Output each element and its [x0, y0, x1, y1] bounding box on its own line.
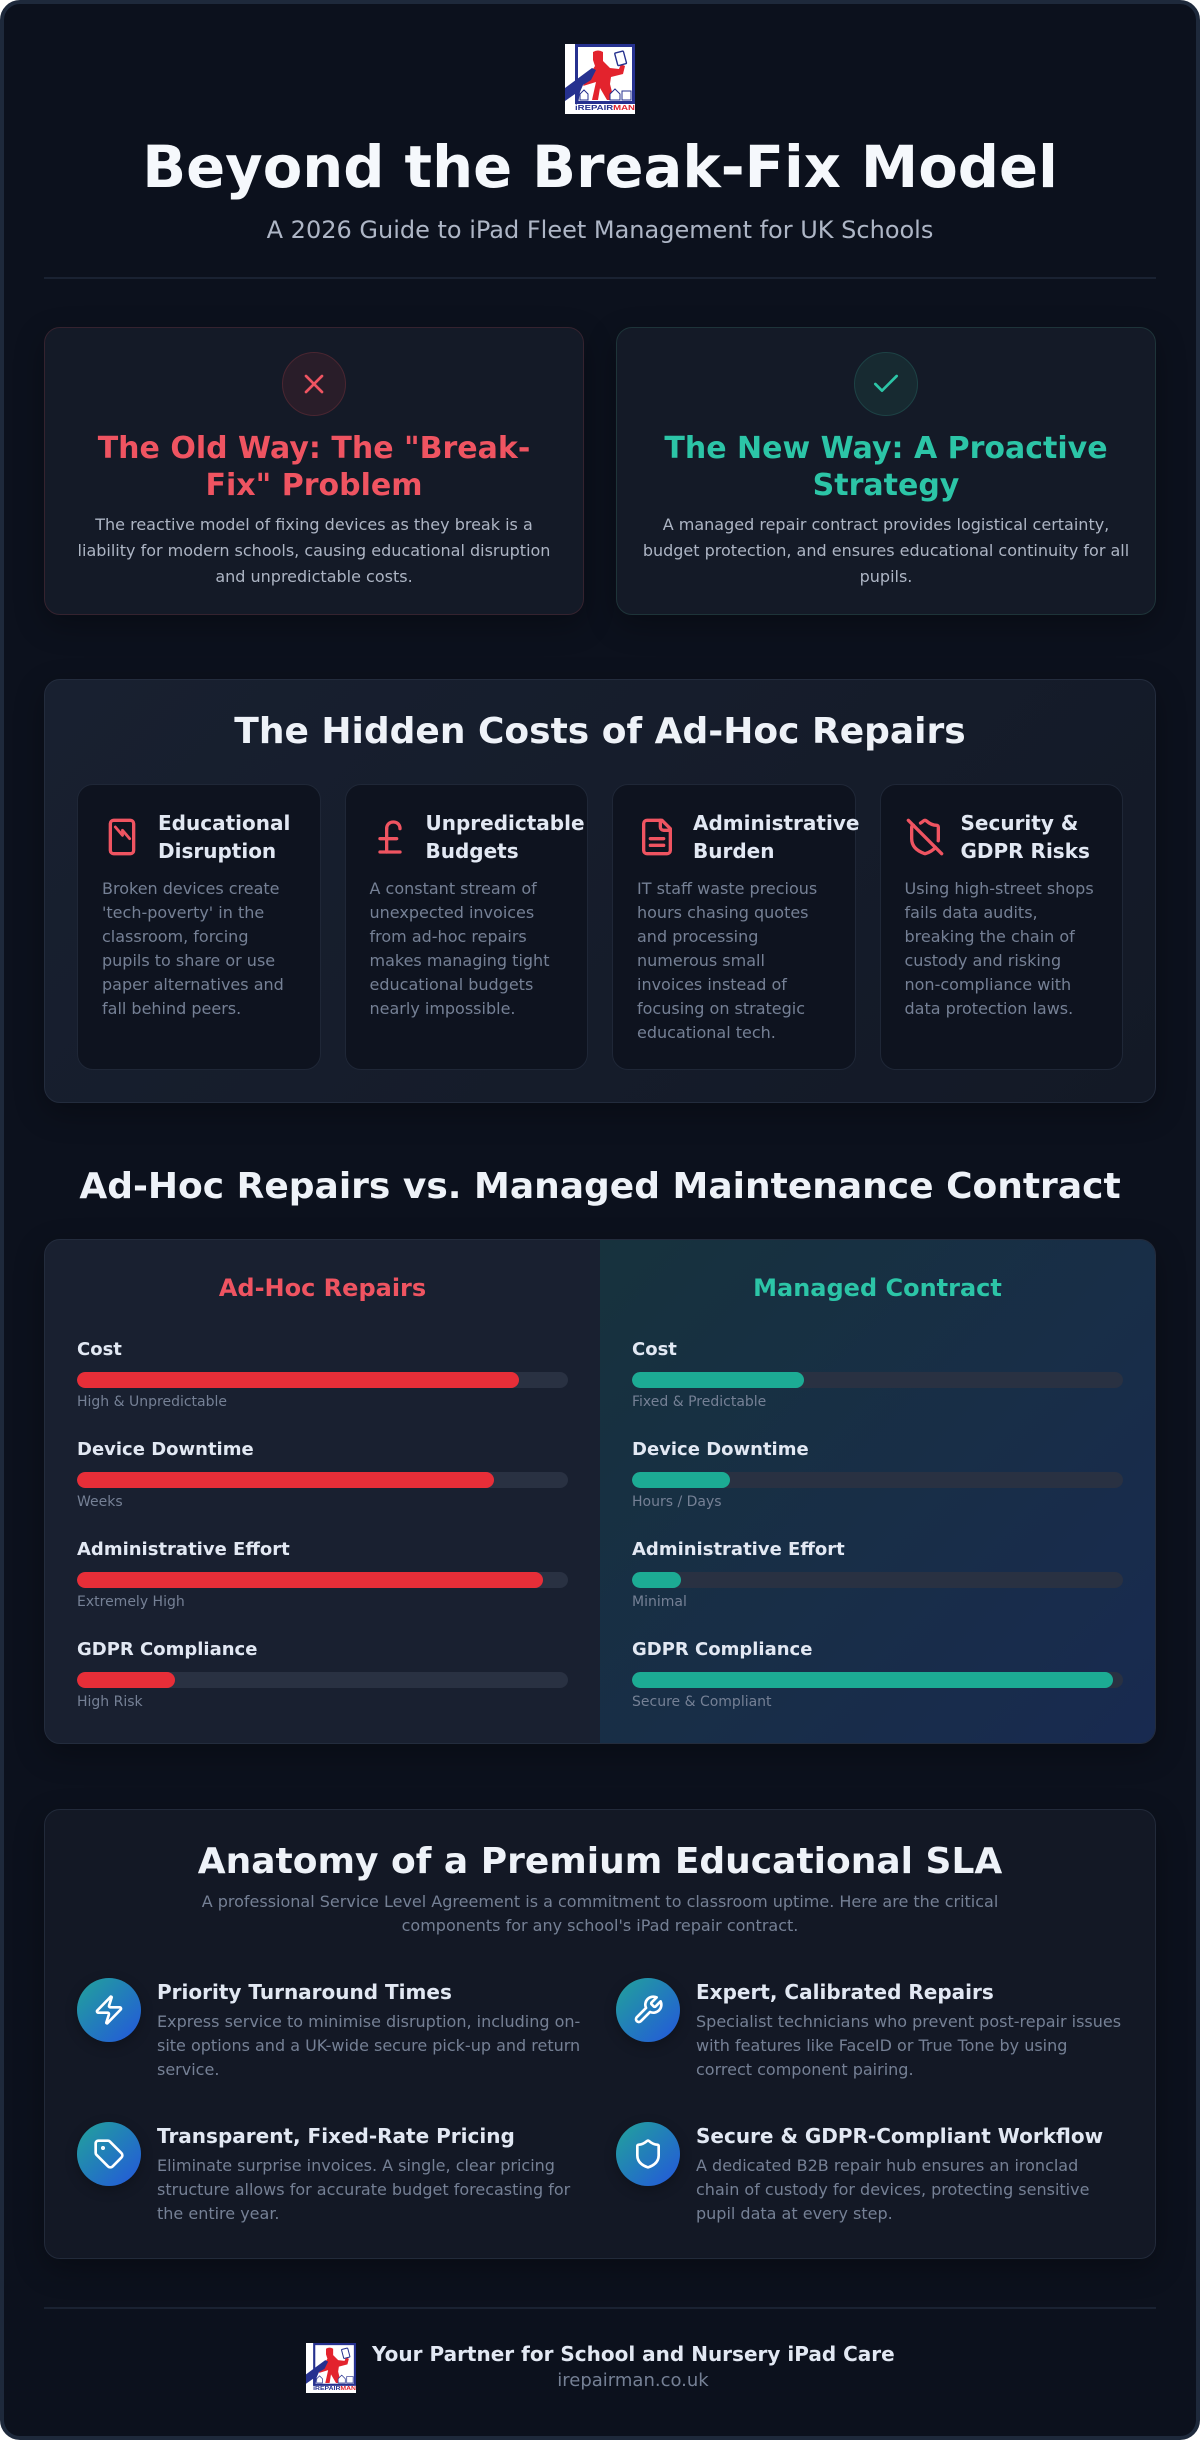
- bar: ad-hoc admin effort: Extremely High: [77, 1594, 185, 1610]
- icon: pound sign: [378, 820, 402, 854]
- icon: check: [854, 352, 918, 416]
- panel: hidden costs: [44, 679, 1156, 1103]
- item text: with features like FaceID or True Tone by using: [696, 2036, 1067, 2055]
- item heading: Transparent, Fixed-Rate Pricing: [157, 2124, 515, 2148]
- text: SLA intro: A professional Service Level Agreement is a commitment to classroom uptime. Here are the critical: [202, 1892, 998, 1911]
- item text: Express service to minimise disruption, including on-: [157, 2012, 580, 2031]
- card text: invoices instead of: [637, 975, 787, 994]
- bar: ad-hoc GDPR: GDPR Compliance: [77, 1638, 257, 1660]
- card heading: Security &: [960, 811, 1078, 835]
- card text: [904, 879, 1094, 1018]
- column heading: managed contract: Managed Contract: [753, 1274, 1002, 1302]
- item text: [696, 2012, 1121, 2079]
- panel: the new way: [616, 327, 1156, 615]
- footer logo: iREPAIR MAN: [313, 2386, 356, 2392]
- bar: ad-hoc downtime: Weeks: [77, 1494, 123, 1510]
- card text: from ad-hoc repairs: [370, 927, 527, 946]
- card text: 'tech-poverty' in the: [102, 903, 264, 922]
- bar: managed downtime: Device Downtime: [632, 1438, 809, 1460]
- bar: ad-hoc GDPR: [77, 1638, 568, 1710]
- card text: Broken devices create: [102, 879, 280, 898]
- icon: cross: [282, 352, 346, 416]
- logo: iRepairMan: [565, 44, 635, 114]
- card text: and processing: [637, 927, 758, 946]
- heading: old way: The Old Way: The "Break-: [98, 431, 530, 466]
- bar: managed admin effort: Minimal: [632, 1594, 687, 1610]
- card text: [370, 879, 550, 1018]
- item text: chain of custody for devices, protecting sensitive: [696, 2180, 1089, 2199]
- card text: classroom, forcing: [102, 927, 248, 946]
- item text: [157, 2156, 570, 2223]
- card text: [637, 879, 817, 1042]
- icon: broken tablet: [108, 818, 136, 856]
- card text: educational tech.: [637, 1023, 776, 1042]
- text: SLA intro: [202, 1892, 998, 1935]
- bar: ad-hoc admin effort: [77, 1538, 568, 1610]
- column heading: ad-hoc repairs: Ad-Hoc Repairs: [219, 1274, 426, 1302]
- item text: service.: [157, 2060, 219, 2079]
- card heading: Educational: [158, 811, 290, 835]
- item heading: Secure & GDPR-Compliant Workflow: [696, 2124, 1103, 2148]
- bar: managed downtime: Hours / Days: [632, 1494, 722, 1510]
- text: new way description: pupils.: [860, 567, 912, 586]
- card text: unexpected invoices: [370, 903, 534, 922]
- item text: Eliminate surprise invoices. A single, clear pricing: [157, 2156, 555, 2175]
- item text: [157, 2012, 580, 2079]
- card text: fails data audits,: [904, 903, 1038, 922]
- heading: new way: Strategy: [813, 468, 959, 502]
- card heading: [158, 811, 290, 863]
- item text: site options and a UK-wide secure pick-up and return: [157, 2036, 580, 2055]
- bar: managed GDPR: Secure & Compliant: [632, 1694, 772, 1710]
- card heading: Burden: [693, 839, 774, 863]
- card text: nearly impossible.: [370, 999, 516, 1018]
- heading: old way: Fix" Problem: [206, 468, 422, 502]
- card text: educational budgets: [370, 975, 533, 994]
- card text: [102, 879, 284, 1018]
- card text: data protection laws.: [904, 999, 1073, 1018]
- heading: new way: [664, 431, 1108, 502]
- card heading: Administrative: [693, 811, 859, 835]
- text: old way description: The reactive model of fixing devices as they break is a: [95, 515, 533, 534]
- bar: managed downtime: [632, 1438, 1123, 1510]
- footer url: irepairman.co.uk: [557, 2370, 709, 2391]
- icon: crossed-out shield: [906, 818, 944, 856]
- heading: comparison: Ad-Hoc Repairs vs. Managed Maintenance Contract: [79, 1166, 1121, 1206]
- card heading: [960, 811, 1090, 863]
- card text: makes managing tight: [370, 951, 549, 970]
- card heading: [426, 811, 585, 863]
- column background: managed contract: [600, 1240, 1156, 1745]
- footer title: Your Partner for School and Nursery iPad Care: [372, 2342, 895, 2366]
- bar: managed GDPR: [632, 1638, 1123, 1710]
- icon: shield: [616, 2122, 680, 2186]
- card heading: GDPR Risks: [960, 839, 1090, 863]
- logo: iRepairMan: iREPAIR MAN: [575, 103, 635, 112]
- card text: A constant stream of: [370, 879, 537, 898]
- heading: hidden costs: The Hidden Costs of Ad-Hoc Repairs: [234, 710, 966, 752]
- bar: managed cost: Cost: [632, 1338, 677, 1360]
- item text: structure allows for accurate budget forecasting for: [157, 2180, 570, 2199]
- text: old way description: [78, 515, 550, 586]
- text: SLA intro: components for any school's iPad repair contract.: [402, 1916, 798, 1935]
- bar: managed GDPR: GDPR Compliance: [632, 1638, 812, 1660]
- panel: comparison chart: [44, 1239, 1156, 1744]
- text: new way description: budget protection, and ensures educational continuity for all: [643, 541, 1129, 560]
- bar: ad-hoc admin effort: Administrative Effort: [77, 1538, 290, 1560]
- card: administrative burden: [612, 784, 856, 1070]
- item: expert repairs: [616, 1978, 1121, 2079]
- text: old way description: liability for modern schools, causing educational disruption: [78, 541, 550, 560]
- title: Beyond the Break-Fix Model: [142, 134, 1058, 201]
- card text: focusing on strategic: [637, 999, 805, 1018]
- heading: SLA: Anatomy of a Premium Educational SLA: [198, 1841, 1002, 1882]
- icon: wrench: [616, 1978, 680, 2042]
- item: transparent pricing: [77, 2122, 570, 2223]
- card: educational disruption: [77, 784, 320, 1070]
- card heading: Unpredictable: [426, 811, 585, 835]
- card: security and GDPR risks: [880, 784, 1123, 1070]
- bar: managed cost: Fixed & Predictable: [632, 1394, 766, 1410]
- card text: Using high-street shops: [904, 879, 1094, 898]
- card text: paper alternatives and: [102, 975, 284, 994]
- card text: IT staff waste precious: [637, 879, 817, 898]
- bar: managed admin effort: [632, 1538, 1123, 1610]
- card heading: Budgets: [426, 839, 519, 863]
- footer logo: [306, 2343, 356, 2393]
- icon: price tag: [77, 2122, 141, 2186]
- card heading: Disruption: [158, 839, 276, 863]
- text: new way description: [643, 515, 1129, 586]
- item: secure workflow: [616, 2122, 1103, 2223]
- item text: correct component pairing.: [696, 2060, 914, 2079]
- subtitle: A 2026 Guide to iPad Fleet Management for UK Schools: [267, 216, 933, 244]
- text: old way description: and unpredictable costs.: [215, 567, 413, 586]
- bar: ad-hoc GDPR: High Risk: [77, 1694, 143, 1710]
- item heading: Expert, Calibrated Repairs: [696, 1980, 994, 2004]
- panel: the old way: [44, 327, 584, 615]
- card text: pupils to share or use: [102, 951, 275, 970]
- text: new way description: A managed repair contract provides logistical certainty,: [663, 515, 1109, 534]
- bar: ad-hoc cost: [77, 1338, 568, 1410]
- item text: pupil data at every step.: [696, 2204, 893, 2223]
- bar: ad-hoc cost: Cost: [77, 1338, 122, 1360]
- card heading: [693, 811, 859, 863]
- bar: managed cost: [632, 1338, 1123, 1410]
- card text: breaking the chain of: [904, 927, 1075, 946]
- item heading: Priority Turnaround Times: [157, 1980, 452, 2004]
- card text: numerous small: [637, 951, 765, 970]
- bar: ad-hoc downtime: Device Downtime: [77, 1438, 254, 1460]
- card text: fall behind peers.: [102, 999, 241, 1018]
- card text: custody and risking: [904, 951, 1061, 970]
- item text: the entire year.: [157, 2204, 280, 2223]
- bar: ad-hoc cost: High & Unpredictable: [77, 1394, 227, 1410]
- card text: hours chasing quotes: [637, 903, 809, 922]
- item text: Specialist technicians who prevent post-repair issues: [696, 2012, 1121, 2031]
- icon: lightning bolt: [77, 1978, 141, 2042]
- item: priority turnaround: [77, 1978, 580, 2079]
- icon: document: [642, 818, 672, 856]
- panel: anatomy of SLA: [44, 1809, 1156, 2259]
- card text: non-compliance with: [904, 975, 1071, 994]
- item text: [696, 2156, 1089, 2223]
- heading: new way: The New Way: A Proactive: [664, 431, 1108, 466]
- card: unpredictable budgets: [344, 784, 588, 1070]
- item text: A dedicated B2B repair hub ensures an ironclad: [696, 2156, 1078, 2175]
- bar: managed admin effort: Administrative Effort: [632, 1538, 845, 1560]
- heading: old way: [98, 431, 530, 502]
- bar: ad-hoc downtime: [77, 1438, 568, 1510]
